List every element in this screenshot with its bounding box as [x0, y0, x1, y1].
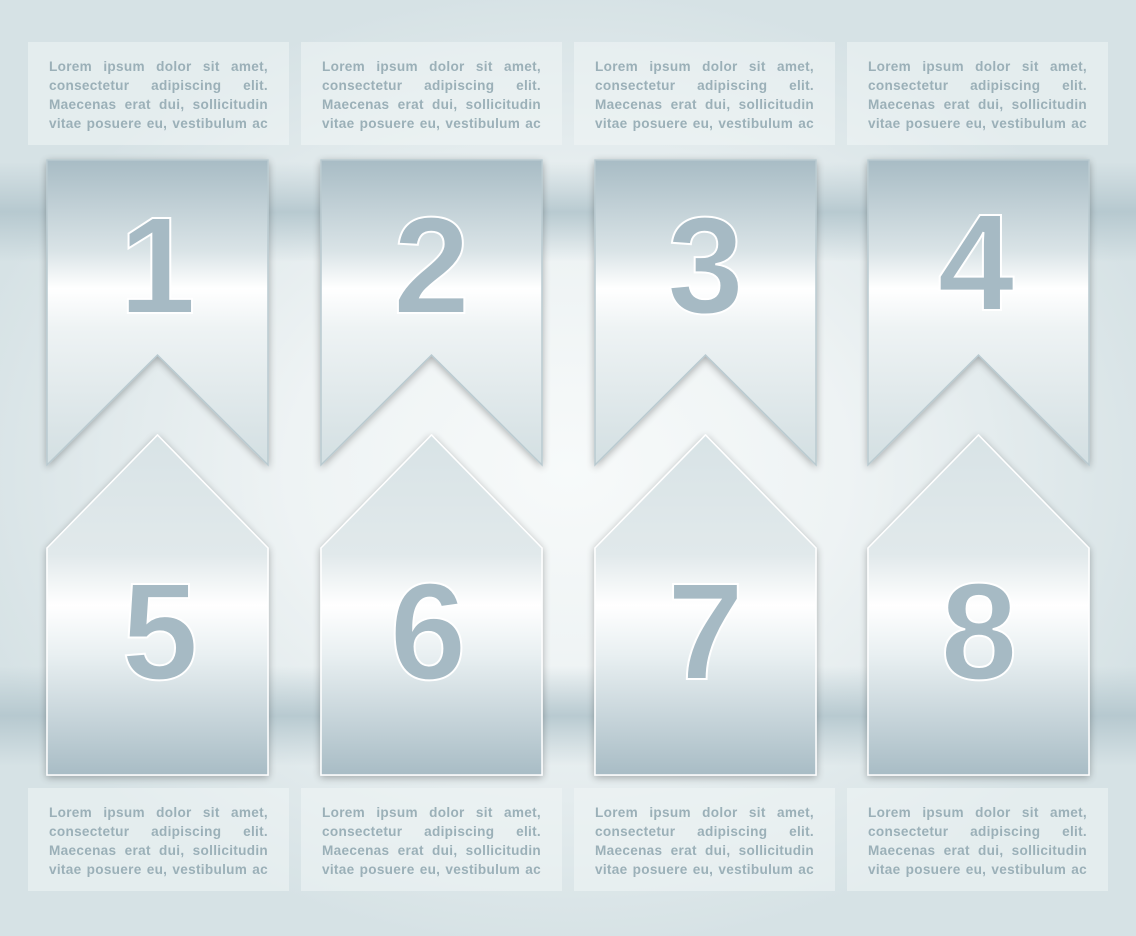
ribbon 2 [321, 160, 542, 465]
tab 5 [47, 435, 268, 775]
text box 2 top: Lorem ipsum dolor sit amet, consectetur adipiscing elit. Maecenas erat dui, sollicitudin vitae posuere eu, vestibulum ac [322, 59, 541, 131]
text box 4 top: Lorem ipsum dolor sit amet, consectetur adipiscing elit. Maecenas erat dui, sollicitudin vitae posuere eu, vestibulum ac [868, 59, 1087, 131]
text box 8 bottom [847, 788, 1108, 891]
number 2: 2 [393, 189, 470, 343]
text box 8 bottom: Lorem ipsum dolor sit amet, consectetur adipiscing elit. Maecenas erat dui, sollicitudin vitae posuere eu, vestibulum ac [868, 805, 1087, 877]
text box 6 bottom: Lorem ipsum dolor sit amet, consectetur adipiscing elit. Maecenas erat dui, sollicitudin vitae posuere eu, vestibulum ac [322, 805, 541, 877]
number 3: 3 [667, 189, 744, 343]
ribbon 4 [868, 160, 1089, 465]
text box 5 bottom [28, 788, 289, 891]
number 8: 8 [941, 555, 1017, 709]
text box 5 bottom: Lorem ipsum dolor sit amet, consectetur adipiscing elit. Maecenas erat dui, sollicitudin vitae posuere eu, vestibulum ac [49, 805, 268, 877]
tab 6 [321, 435, 542, 775]
text box 7 bottom [574, 788, 835, 891]
text box 7 bottom: Lorem ipsum dolor sit amet, consectetur adipiscing elit. Maecenas erat dui, sollicitudin vitae posuere eu, vestibulum ac [595, 805, 814, 877]
text box 3 top [574, 42, 835, 145]
ribbon 1 [47, 160, 268, 465]
ribbon 3 [595, 160, 816, 465]
text box 1 top [28, 42, 289, 145]
tab 8 [868, 435, 1089, 775]
text box 1 top: Lorem ipsum dolor sit amet, consectetur adipiscing elit. Maecenas erat dui, sollicitudin vitae posuere eu, vestibulum ac [49, 59, 268, 131]
tab 7 [595, 435, 816, 775]
number 6: 6 [390, 555, 466, 709]
number 7: 7 [667, 555, 744, 709]
text box 2 top [301, 42, 562, 145]
number 1: 1 [119, 189, 196, 343]
text box 6 bottom [301, 788, 562, 891]
number 4: 4 [938, 186, 1015, 340]
number 5: 5 [122, 555, 198, 709]
text box 3 top: Lorem ipsum dolor sit amet, consectetur adipiscing elit. Maecenas erat dui, sollicitudin vitae posuere eu, vestibulum ac [595, 59, 814, 131]
text box 4 top [847, 42, 1108, 145]
